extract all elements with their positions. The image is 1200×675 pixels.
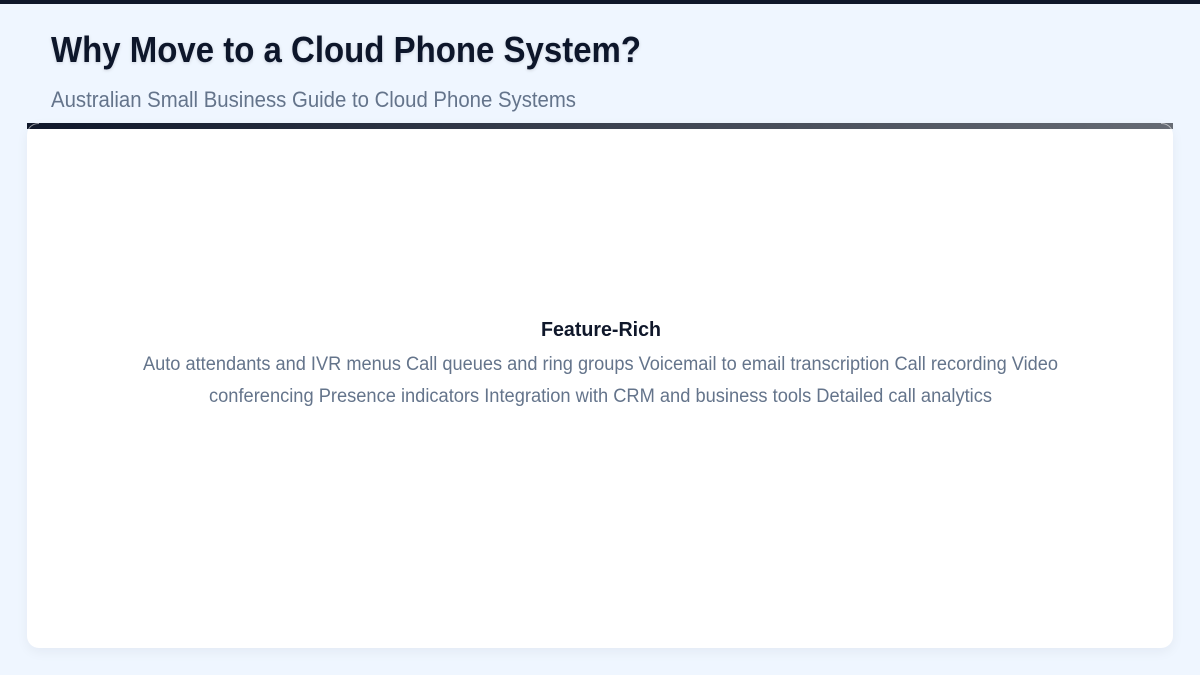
feature description	[143, 354, 1058, 407]
feature block	[143, 318, 1058, 407]
feature description: Auto attendants and IVR menus Call queues and ring groups Voicemail to email transcription Call recording Video	[143, 354, 1058, 375]
top accent bar	[0, 0, 1200, 4]
panel: main card	[27, 123, 1173, 648]
card gradient header strip	[27, 123, 1173, 129]
subtitle: Australian Small Business Guide to Cloud Phone Systems	[51, 87, 576, 112]
card corner highlights	[29, 123, 1171, 129]
title: Why Move to a Cloud Phone System?	[51, 29, 641, 70]
feature heading: Feature-Rich	[541, 318, 661, 341]
feature description: conferencing Presence indicators Integration with CRM and business tools Detailed call analytics	[209, 386, 992, 407]
